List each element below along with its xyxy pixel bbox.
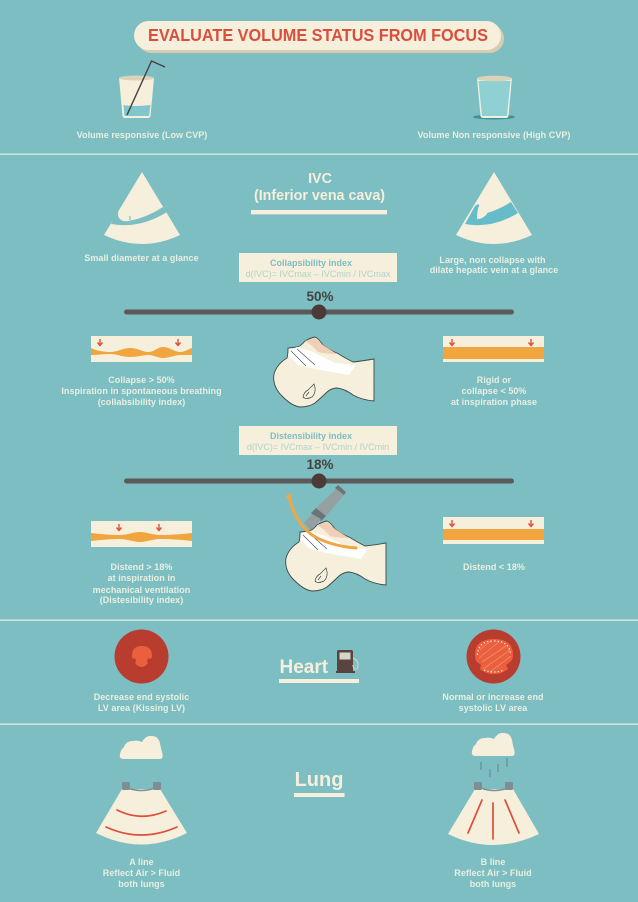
- label: A line: Reflect Air > Fluid: [103, 868, 180, 878]
- 50% slider: 50%: [306, 289, 334, 304]
- icon: fuel pump: [336, 650, 358, 673]
- callout: distensibility index: Distensibility index: [270, 431, 352, 441]
- text: distend > 18%: Distend > 18%: [111, 562, 172, 572]
- label: volume non responsive: Volume Non responsive (High CVP): [418, 130, 570, 140]
- icon: A-line lung probe: [96, 782, 187, 844]
- title: [134, 21, 504, 53]
- label: B line: both lungs: [470, 879, 516, 889]
- callout: collapsibility index: Collapsibility index: [270, 258, 352, 268]
- heading: lung: Lung: [295, 769, 343, 791]
- label: B line: [454, 857, 532, 889]
- diagram: non-distending vein: [443, 517, 544, 544]
- illustration: head with laryngoscope and tube: [286, 485, 386, 591]
- callout: distensibility index: d(IVC)= IVCmax – IVCmin / IVCmin: [247, 442, 389, 452]
- label: normal or increase: systolic LV area: [459, 703, 528, 713]
- heading: IVC: (Inferior vena cava): [254, 188, 385, 204]
- text: rigid or collapse < 50%: at inspiration phase: [451, 397, 537, 407]
- label: normal or increase: [442, 692, 544, 713]
- callout: collapsibility index: [239, 253, 397, 282]
- label: large non collapse: [430, 255, 558, 275]
- title: EVALUATE VOLUME STATUS FROM FOCUS: [148, 25, 488, 45]
- icon: cloud: [120, 736, 163, 759]
- diagram: distending vein: [91, 521, 192, 547]
- heading: IVC: [251, 171, 387, 214]
- label: A line: [103, 857, 180, 889]
- label: A line: both lungs: [118, 879, 165, 889]
- text: distend > 18%: mechanical ventilation: [93, 585, 190, 595]
- label: decrease end systolic: Decrease end systolic: [94, 692, 189, 702]
- label: small diameter: Small diameter at a glance: [84, 253, 199, 263]
- icon: large IVC ultrasound fan: [456, 172, 532, 244]
- text: collapse > 50%: Inspiration in spontaneous breathing: [61, 386, 222, 396]
- label: volume responsive: Volume responsive (Low CVP): [77, 130, 207, 140]
- heading: IVC: IVC: [308, 171, 332, 187]
- label: B line: Reflect Air > Fluid: [454, 868, 532, 878]
- text: distend < 18%: Distend < 18%: [463, 562, 525, 572]
- label: decrease end systolic: LV area (Kissing LV): [98, 703, 185, 713]
- callout: distensibility index: [239, 426, 397, 455]
- text: distend > 18%: [93, 562, 190, 605]
- diagram: rigid vein: [443, 336, 544, 362]
- label: large non collapse: dilate hepatic vein at a glance: [430, 265, 558, 275]
- label: decrease end systolic: [94, 692, 189, 713]
- 18% slider: [124, 457, 514, 488]
- text: rigid or collapse < 50%: collapse < 50%: [462, 386, 526, 396]
- icon: rain cloud: [472, 733, 515, 777]
- text: rigid or collapse < 50%: [451, 375, 537, 407]
- icon: small IVC ultrasound fan: [104, 172, 180, 244]
- text: collapse > 50%: [61, 375, 222, 407]
- label: B line: B line: [481, 857, 505, 867]
- label: normal or increase: Normal or increase end: [442, 692, 544, 702]
- text: collapse > 50%: (collabsibility index): [98, 397, 185, 407]
- text: distend > 18%: at inspiration in: [108, 573, 175, 583]
- 50% slider: [124, 289, 514, 320]
- text: collapse > 50%: Collapse > 50%: [108, 375, 175, 385]
- callout: collapsibility index: d(IVC)= IVCmax – IVCmin / IVCmax: [246, 269, 391, 279]
- icon: glass with low water and straw: [119, 61, 165, 118]
- illustration: head, spontaneous breathing: [274, 337, 374, 407]
- diagram: collapsing vein: [91, 336, 192, 362]
- icon: normal LV heart: [466, 630, 520, 684]
- text: rigid or collapse < 50%: Rigid or: [477, 375, 512, 385]
- text: distend > 18%: (Distesibility index): [100, 595, 183, 605]
- 18% slider: 18%: [306, 457, 334, 472]
- heading: heart with fuel pump: [279, 650, 359, 683]
- label: large non collapse: Large, non collapse with: [439, 255, 546, 265]
- icon: full glass: [473, 76, 515, 120]
- icon: kissing LV heart: [114, 630, 168, 684]
- icon: B-line lung probe: [448, 782, 539, 845]
- label: A line: A line: [129, 857, 154, 867]
- heading: heart with fuel pump: Heart: [280, 657, 329, 678]
